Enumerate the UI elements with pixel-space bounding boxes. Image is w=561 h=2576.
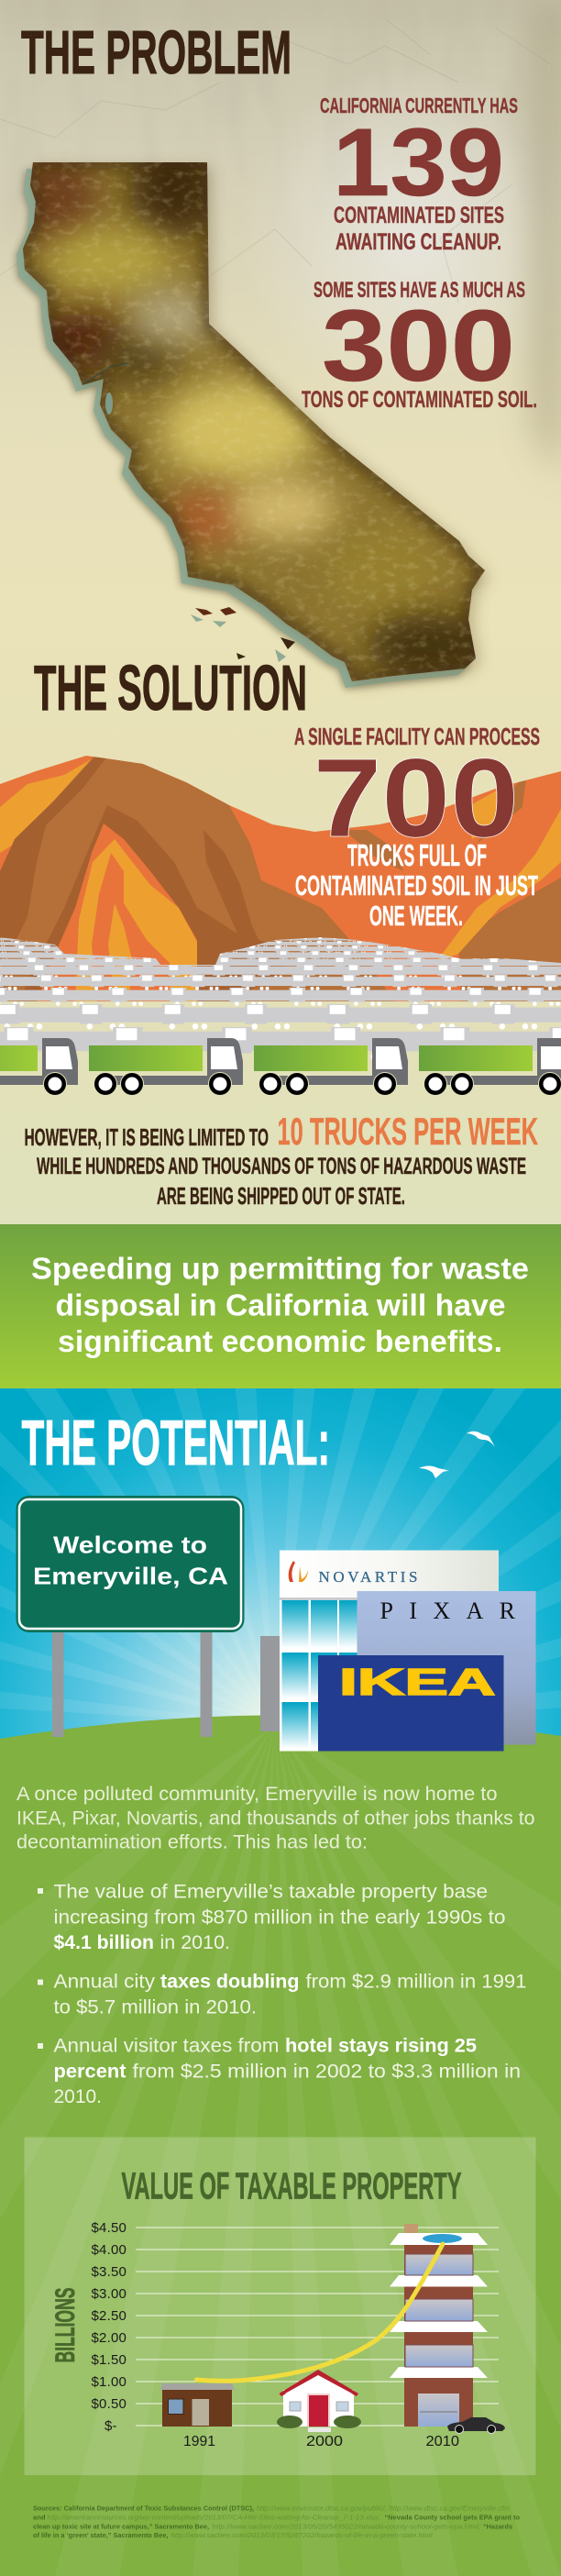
bullet: hotel stays rising: Annual visitor taxes from [53, 2036, 279, 2056]
bullet: hotel stays rising [38, 2036, 521, 2107]
green banner: significant economic benefits. [58, 1324, 502, 1358]
bullet: taxable property base [38, 1882, 506, 1953]
stat: a single facility: 700 [314, 735, 519, 860]
x axis labels: 1991 [183, 2434, 215, 2449]
bullet: city taxes doubling [38, 1972, 526, 2018]
bullet: city taxes doubling: to $5.7 million in 2010. [53, 1997, 257, 2018]
novartis building [280, 1550, 499, 1752]
intro paragraph: IKEA, Pixar, Novartis, and thousands of other jobs thanks to [16, 1808, 535, 1829]
pixar building [358, 1591, 535, 1744]
sources footnote: http://www.sacbee.com/2013/05/20/5435022/nevada-county-school-gets-epa.html; [213, 2522, 480, 2531]
sources footnote: Sources: California Department of Toxic Substances Control (DTSC), [33, 2504, 254, 2513]
y axis labels: $0.50 [92, 2396, 126, 2412]
icon: car [447, 2417, 505, 2434]
green hill and lower background [0, 1687, 561, 2576]
stat: a single facility: ONE WEEK. [369, 900, 463, 932]
sources footnote: clean up toxic site at future campus,” Sacramento Bee, [33, 2522, 209, 2531]
y axis labels: $4.50 [92, 2220, 126, 2236]
x axis labels: 2010 [425, 2434, 459, 2449]
welcome sign: Welcome to [53, 1531, 207, 1559]
text: limited to 10 trucks per week: HOWEVER, IT IS BEING LIMITED TO [24, 1123, 269, 1151]
sources footnote [33, 2504, 520, 2539]
y axis labels: $4.00 [92, 2242, 126, 2258]
sources footnote: http://americanresources.org/wp-content/uploads/2013/07/CA-HW-Sites-waiting-for-Cleanup_7-1-13.xlsx; [48, 2513, 380, 2522]
panel: value of taxable property chart [24, 2137, 535, 2475]
icon: tower 2010 [390, 2224, 488, 2427]
pixar building: PIXAR [380, 1598, 516, 1624]
sources footnote: and [33, 2513, 46, 2522]
y axis labels: $3.50 [92, 2264, 126, 2280]
crowd of grey trucks [0, 937, 561, 1064]
trend line [196, 2244, 443, 2381]
green banner [0, 1224, 561, 1388]
ikea building: IKEA [339, 1661, 495, 1703]
x axis labels [183, 2434, 459, 2449]
mountains illustration [0, 752, 561, 1001]
heading: the solution: THE SOLUTION [34, 652, 307, 724]
front row of green trucks [0, 1038, 561, 1095]
bullet: hotel stays rising: percent [53, 2062, 126, 2082]
ikea building [318, 1655, 504, 1752]
intro paragraph [16, 1784, 535, 1852]
grid lines [136, 2228, 499, 2426]
channel islands [191, 607, 295, 662]
bullet: taxable property base: in 2010. [160, 1932, 230, 1953]
bullet: city taxes doubling: Annual city [53, 1972, 156, 1992]
stats: 139 contaminated sites: 139 [333, 109, 504, 216]
stats: 300 tons of soil: 300 [322, 290, 515, 403]
welcome sign [16, 1496, 244, 1737]
y axis labels: $2.00 [92, 2330, 126, 2346]
icon: house 2000 [277, 2370, 361, 2432]
sources footnote: “Nevada County school gets EPA grant to [385, 2513, 520, 2522]
bullet: taxable property base: The value of Emeryville’s taxable property base [53, 1882, 488, 1902]
novartis building: NOVARTIS [319, 1568, 418, 1586]
company buildings [260, 1550, 535, 1752]
y axis labels [92, 2220, 126, 2434]
bullet: city taxes doubling: from $2.9 million in 1991 [306, 1972, 526, 1992]
green banner: Speeding up permitting for waste [31, 1251, 529, 1286]
intro paragraph: decontamination efforts. This has led to: [16, 1832, 368, 1852]
x axis labels: 2000 [306, 2434, 343, 2449]
intro paragraph: A once polluted community, Emeryville is now home to [16, 1784, 497, 1805]
bullet: hotel stays rising: 2010. [53, 2086, 102, 2107]
sources footnote: http://www.envirostor.dtsc.ca.gov/public/, http://www.dtsc.ca.gov/Emeryville.cfm [257, 2504, 510, 2513]
sources footnote: of life in a ‘green’ state,” Sacramento Bee, [33, 2531, 169, 2539]
paper background: problem and solution sections [0, 0, 561, 1224]
sky with sunburst [0, 1388, 561, 1739]
y axis labels: $1.50 [92, 2352, 126, 2368]
sources footnote: http://www.sacbee.com/2013/03/17/5267202/hazards-of-life-in-a-green-state.html [170, 2531, 433, 2539]
bullet: taxable property base: $4.1 billion [53, 1932, 154, 1953]
stat: a single facility [294, 723, 540, 932]
bullet: taxable property base: increasing from $870 million in the early 1990s to [53, 1907, 506, 1928]
bullet: city taxes doubling: taxes doubling [160, 1972, 299, 1992]
heading: the potential: THE POTENTIAL: [22, 1407, 330, 1478]
stats: 139 contaminated sites [320, 94, 518, 255]
icon: birds [419, 1432, 495, 1478]
sources footnote: “Hazards [483, 2522, 512, 2531]
green banner: disposal in California will have [55, 1288, 506, 1322]
y axis labels: $1.00 [92, 2374, 126, 2390]
y axis title: BILLIONS [50, 2287, 81, 2362]
y axis labels: $- [104, 2418, 117, 2434]
bullet: hotel stays rising: hotel stays rising 25 [285, 2036, 477, 2056]
california map [11, 160, 492, 694]
icon: shack 1991 [160, 2383, 235, 2427]
bullet: hotel stays rising: from $2.5 million in 2002 to $3.3 million in [132, 2062, 521, 2082]
text: limited to 10 trucks per week [24, 1110, 538, 1210]
welcome sign: Emeryville, CA [33, 1563, 228, 1590]
heading: the problem: THE PROBLEM [21, 18, 292, 87]
stats: 300 tons of soil [302, 278, 537, 413]
y axis labels: $2.50 [92, 2308, 126, 2324]
y axis labels: $3.00 [92, 2286, 126, 2302]
